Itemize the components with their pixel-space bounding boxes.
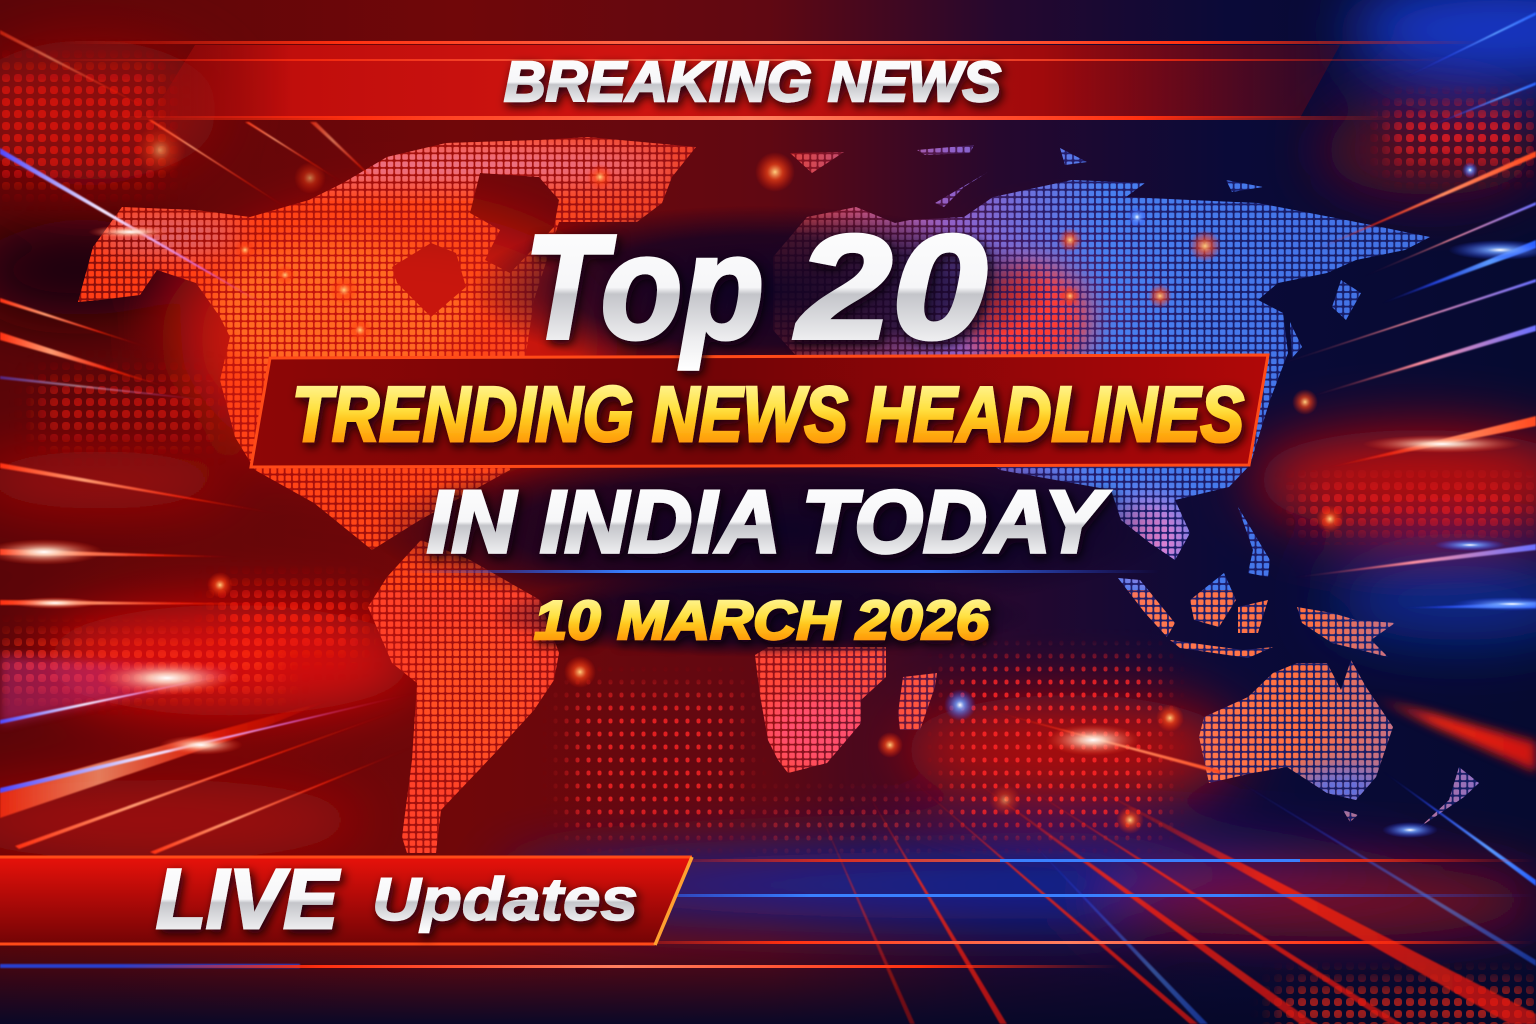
title: top 20: Top xyxy=(524,205,764,370)
map base xyxy=(78,137,1479,853)
banner right edge xyxy=(655,857,692,945)
map colour tints xyxy=(100,147,1390,812)
banner bottom rule xyxy=(100,116,1400,120)
title band xyxy=(251,355,1268,467)
light streaks top left xyxy=(0,30,385,214)
top banner xyxy=(40,41,1480,120)
live updates banner xyxy=(0,852,692,946)
live label: LIVE xyxy=(156,852,341,946)
dot field bottom centre xyxy=(570,660,1160,840)
wide red bands xyxy=(0,655,1536,818)
banner secondary rule xyxy=(40,59,1440,61)
date: 10 MARCH 2026 xyxy=(534,589,989,651)
banner band xyxy=(150,45,1340,118)
floor perspective lines xyxy=(810,770,1536,1024)
map dots lower xyxy=(368,590,1479,853)
subtitle: in india today: IN INDIA TODAY xyxy=(427,472,1110,571)
light streaks left xyxy=(0,148,420,918)
divider glow line xyxy=(400,570,1160,573)
world map xyxy=(78,137,1479,853)
top corner blue streaks xyxy=(1400,12,1536,130)
bottom rules xyxy=(0,859,1536,968)
dark shadow behind text xyxy=(370,206,1170,657)
banner panel xyxy=(0,857,692,945)
band panel xyxy=(251,355,1268,467)
title: top 20: 20 xyxy=(794,205,987,370)
banner top rule xyxy=(60,41,1480,44)
lens flares xyxy=(0,124,1536,838)
updates label: Updates xyxy=(372,866,638,933)
heading: breaking news: BREAKING NEWS xyxy=(504,50,1001,114)
banner top and bottom rules xyxy=(0,857,692,944)
light streaks right xyxy=(980,151,1536,966)
map dots upper xyxy=(78,137,1430,590)
heading: trending news headlines: TRENDING NEWS HEADLINES xyxy=(292,370,1244,458)
